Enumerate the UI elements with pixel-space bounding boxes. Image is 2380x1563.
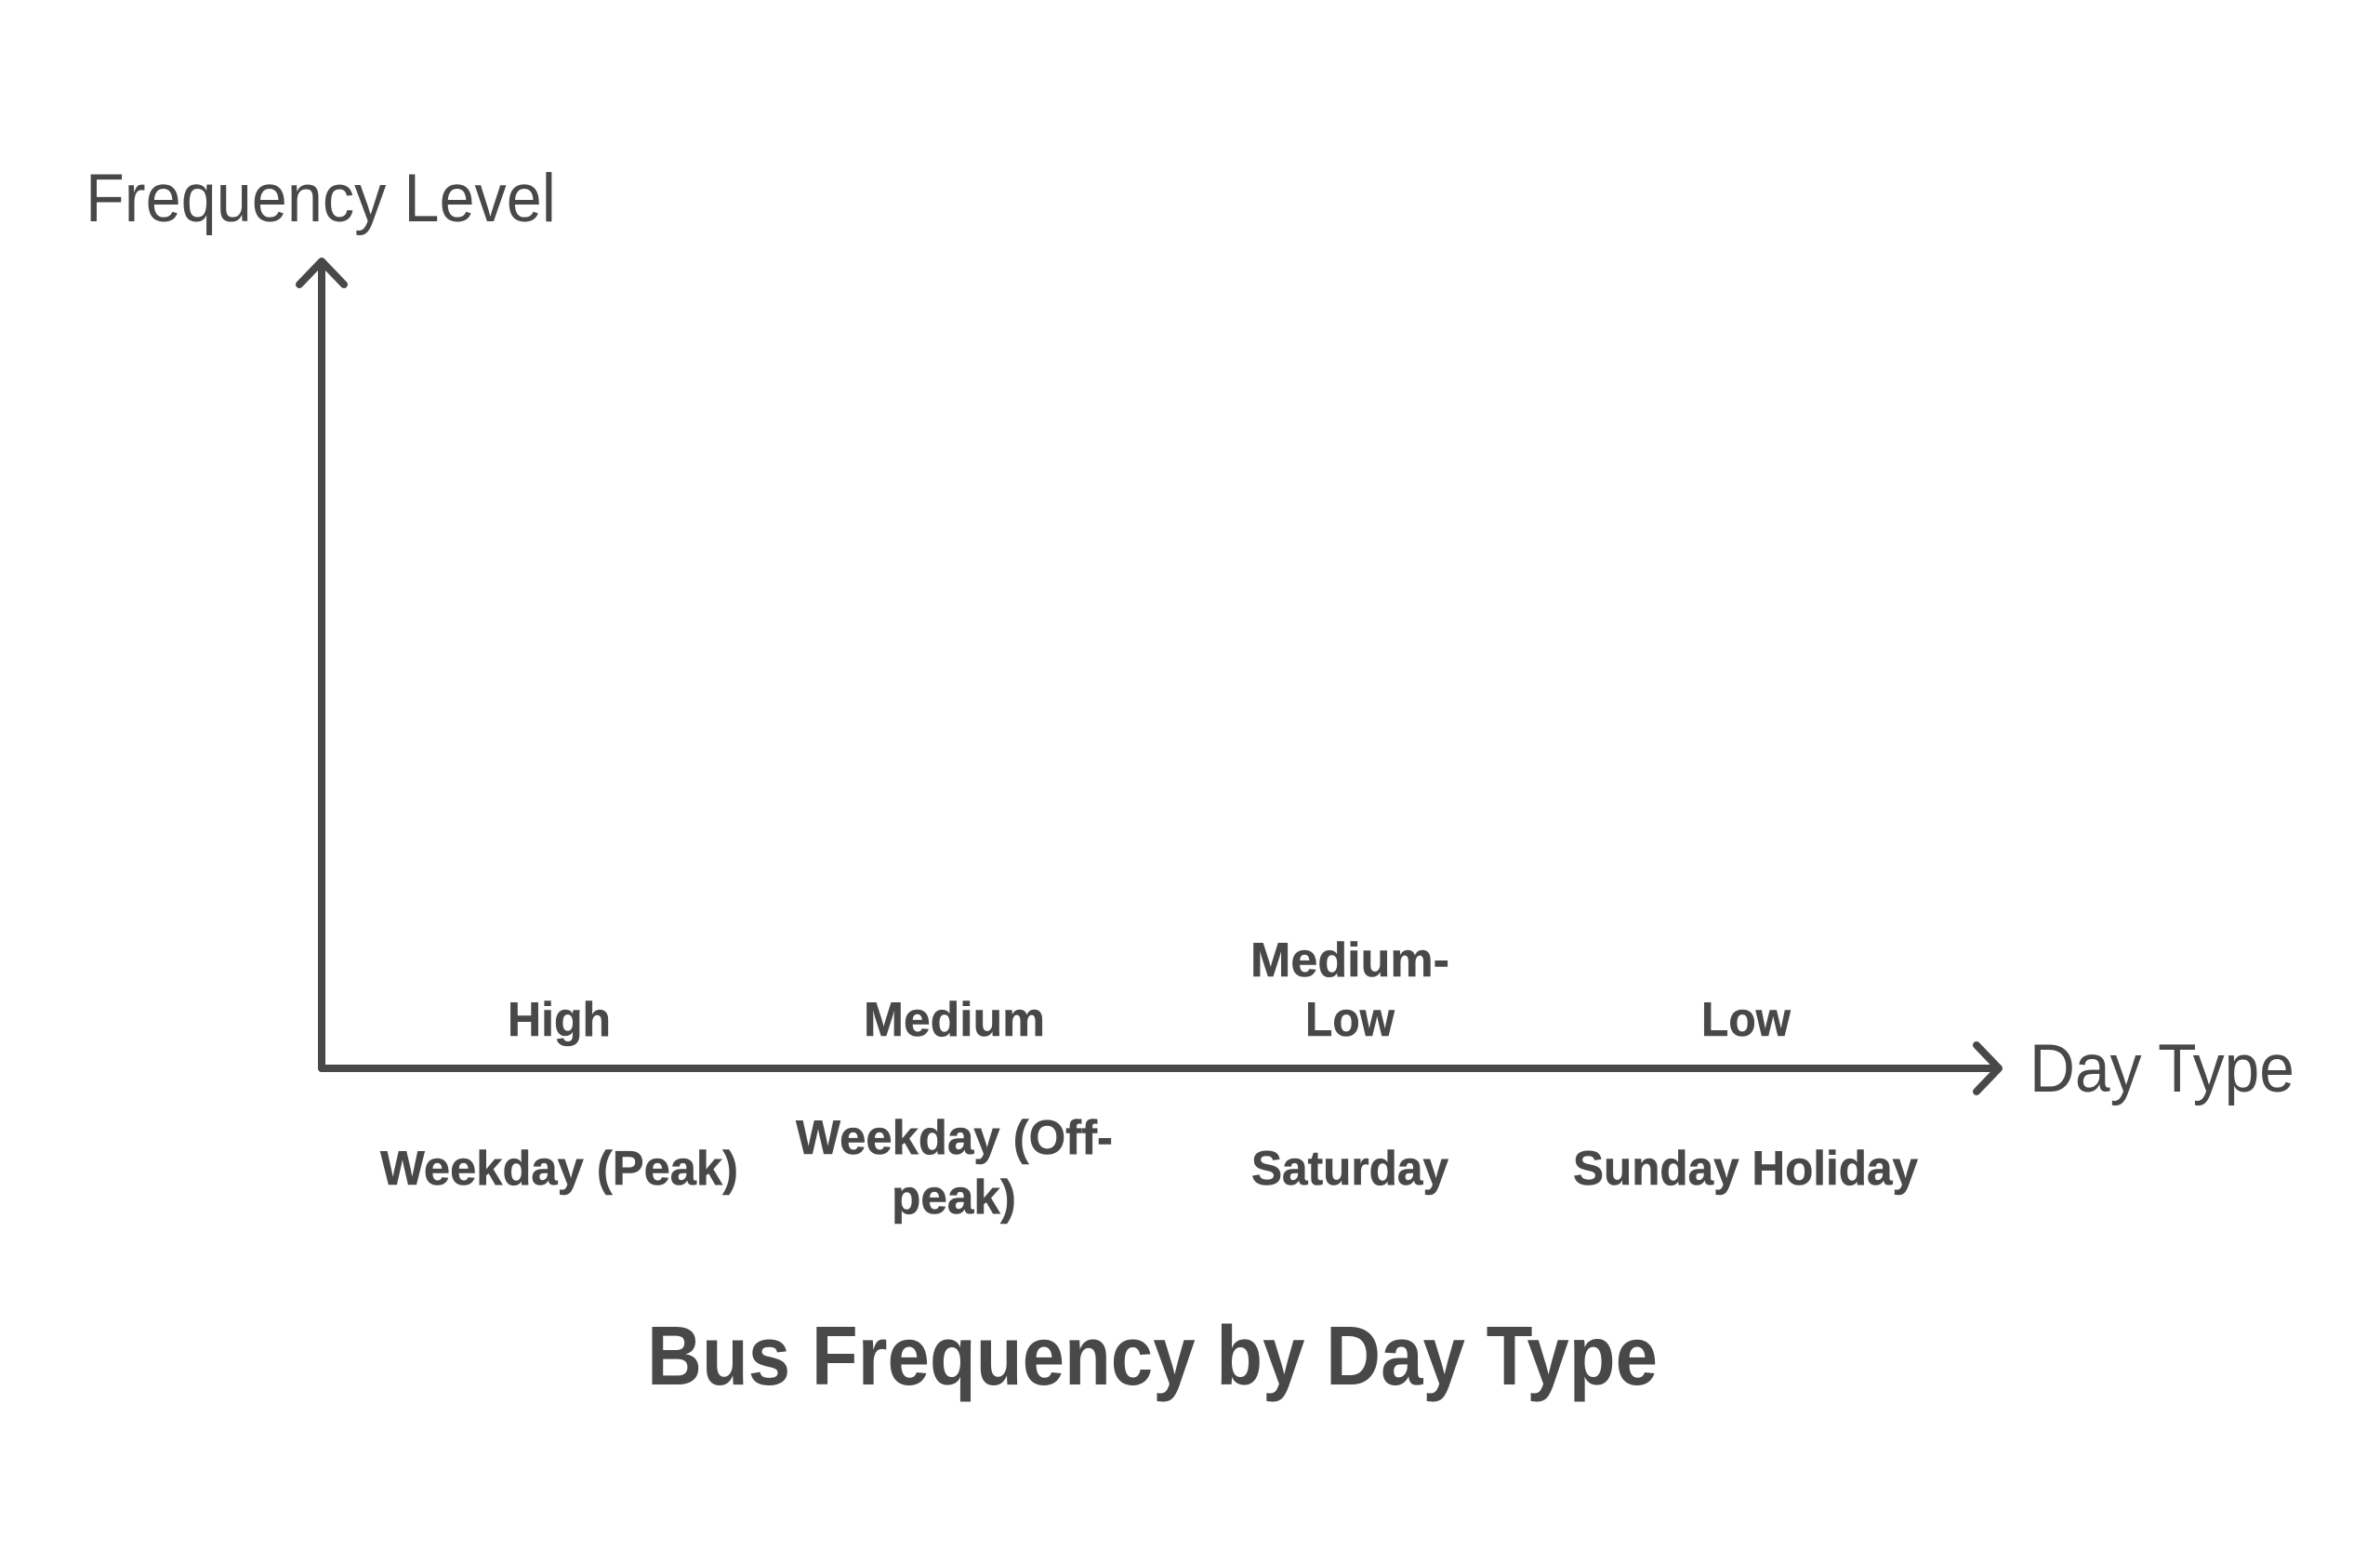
category label: Weekday (Off-peak): Weekday (Off- [796,1111,1113,1165]
value label: High: High [508,993,611,1047]
category label: Weekday (Off-peak) [796,1111,1113,1225]
value label: Medium-Low: Medium- [1250,934,1449,987]
category label: Saturday: Saturday [1251,1142,1448,1196]
category label: Weekday (Peak): Weekday (Peak) [380,1142,738,1196]
category label: Sunday Holiday: Sunday Holiday [1573,1142,1918,1196]
y-axis label: Frequency Level [86,161,556,236]
value label: Medium-Low [1250,934,1449,1047]
value label: Medium: Medium [864,993,1045,1047]
x-axis arrow [322,1045,1999,1092]
title: Bus Frequency by Day Type [647,1310,1658,1403]
x-axis label: Day Type [2030,1031,2294,1106]
value label: Low: Low [1701,993,1792,1047]
value label: Medium-Low: Low [1305,993,1395,1047]
y-axis arrow [299,261,344,1068]
category label: Weekday (Off-peak): peak) [892,1171,1016,1225]
